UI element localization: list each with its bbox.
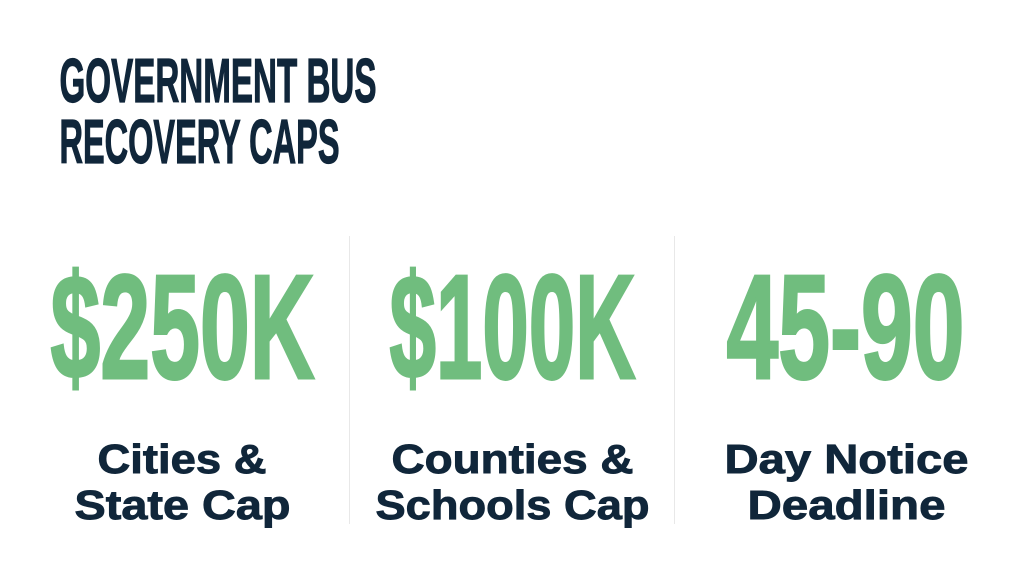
label: counties and schools cap	[376, 436, 650, 528]
label: counties and schools cap: Counties &	[392, 436, 634, 482]
label: day notice deadline	[724, 436, 968, 528]
label: day notice deadline: Day Notice	[724, 436, 968, 482]
label: day notice deadline: Deadline	[748, 482, 946, 528]
stat: $100K: $100K	[390, 245, 636, 410]
panel: day notice deadline	[724, 245, 968, 528]
title: GOVERNMENT BUS	[60, 47, 376, 116]
panel: counties and schools cap	[376, 245, 650, 528]
label: cities and state cap: State Cap	[74, 482, 290, 528]
label: cities and state cap: Cities &	[98, 436, 266, 482]
title: RECOVERY CAPS	[60, 108, 340, 177]
label: cities and state cap	[74, 436, 290, 528]
stat: $250K: $250K	[50, 245, 314, 410]
label: counties and schools cap: Schools Cap	[376, 482, 650, 528]
title	[60, 47, 376, 177]
panel: cities and state cap	[50, 245, 314, 528]
